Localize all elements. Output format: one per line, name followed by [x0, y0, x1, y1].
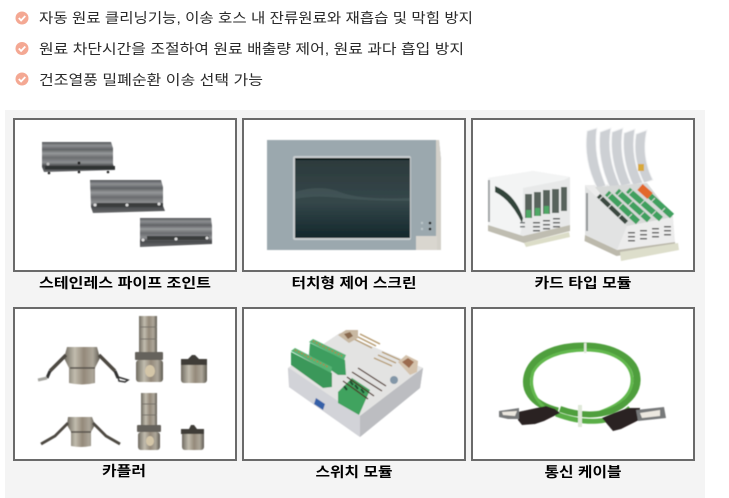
caption: 스테인레스 파이프 조인트 [39, 275, 211, 291]
image: switch module [288, 330, 423, 437]
bullet 3: 건조열풍 밀폐순환 이송 선택 가능 [39, 72, 263, 88]
image: touch screen [267, 140, 441, 250]
image: couplers [38, 316, 207, 450]
product card: switch module [243, 308, 465, 480]
product card: card type module [472, 119, 694, 291]
caption: 스위치 모듈 [316, 464, 393, 480]
image: pipe joints [42, 142, 212, 247]
closed module [488, 171, 570, 247]
bullet 1: 자동 원료 클리닝기능, 이송 호스 내 잔류원료와 재흡습 및 막힘 방지 [39, 10, 473, 26]
caption: 카플러 [102, 463, 146, 479]
caption: 통신 케이블 [544, 464, 622, 480]
product card: stainless pipe joint [14, 119, 236, 291]
bullet 2: 원료 차단시간을 조절하여 원료 배출량 제어, 원료 과다 흡입 방지 [39, 41, 464, 57]
image: green cable [499, 343, 666, 431]
image: card modules [488, 128, 679, 261]
top coupler set [38, 316, 207, 384]
product card: coupler [14, 308, 236, 479]
terminal block B [291, 352, 332, 388]
feature bullet list [16, 10, 473, 88]
connectors [338, 330, 358, 343]
caption: 카드 타입 모듈 [534, 275, 632, 291]
caption: 터치형 제어 스크린 [292, 275, 416, 291]
product card: communication cable [472, 308, 694, 480]
terminal block C [338, 378, 370, 415]
stripes [343, 368, 386, 399]
bottom coupler set [41, 393, 204, 450]
product card: touch control screen [243, 119, 465, 291]
open module [584, 128, 679, 261]
gray product panel [5, 110, 705, 498]
terminal block A [309, 343, 346, 375]
